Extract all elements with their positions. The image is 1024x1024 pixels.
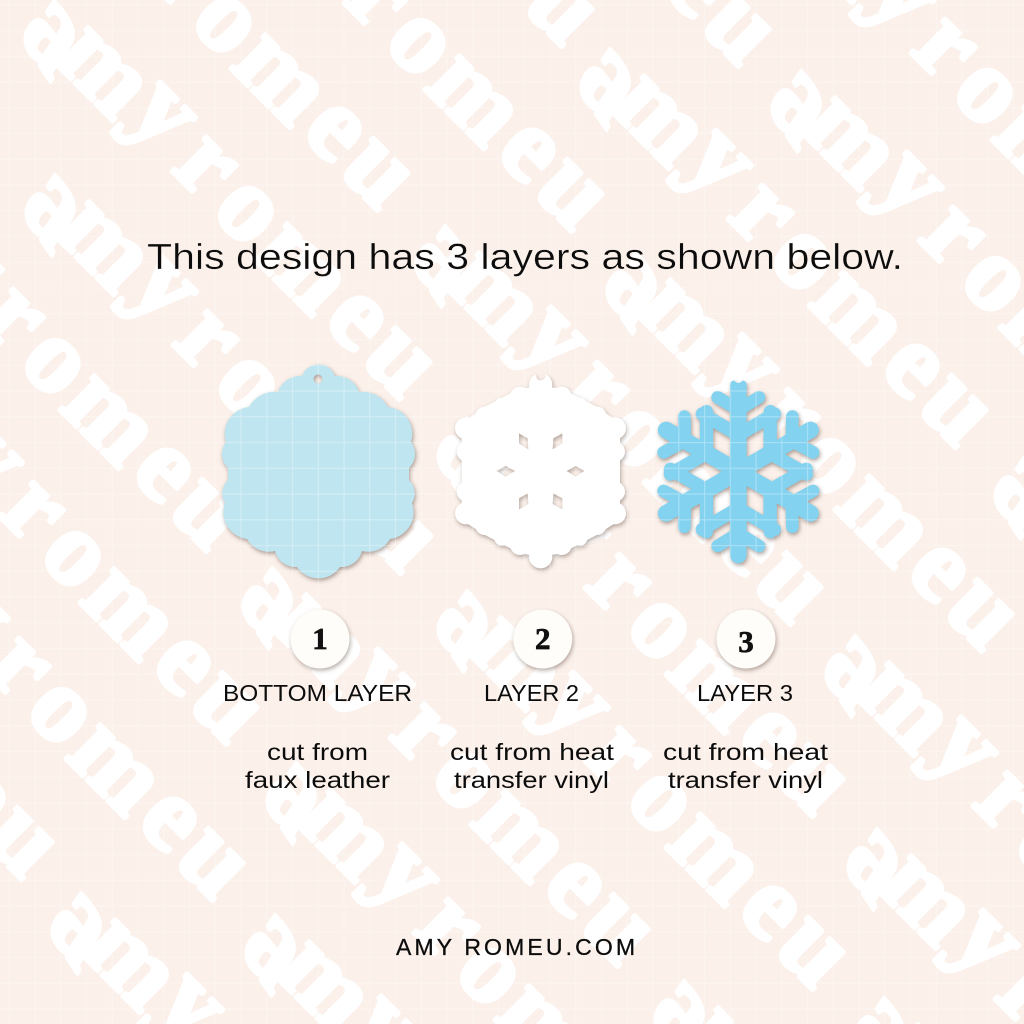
watermark pattern: amy romeu: a: [33, 844, 135, 995]
watermark pattern: amy romeu: a: [7, 126, 109, 277]
number badge 1: 1: [312, 621, 328, 656]
layer 1 material: cut from: [267, 739, 368, 765]
layer 1 material: [245, 739, 390, 793]
watermark pattern: amy romeu: a: [419, 369, 521, 520]
layer 3 label: LAYER 3: [697, 680, 793, 706]
watermark pattern: amy romeu: my romeu: [36, 167, 469, 592]
layer 3: blue snowflake: [648, 381, 828, 555]
footer website: AMY ROMEU.COM: [396, 934, 635, 960]
watermark pattern: amy romeu: my romeu: [448, 583, 881, 1008]
layer 1 material: faux leather: [245, 767, 390, 793]
layer 2 material: transfer vinyl: [454, 767, 609, 793]
watermark pattern: amy romeu: my romeu: [591, 41, 1024, 466]
watermark pattern: amy romeu: a: [224, 519, 326, 670]
watermark pattern: amy romeu: a: [588, 204, 690, 355]
number badge 2: [513, 610, 572, 668]
watermark pattern: amy romeu: a: [829, 780, 931, 931]
watermark pattern: amy romeu: my romeu: [253, 560, 686, 985]
layer 2 material: [450, 739, 615, 793]
watermark pattern: amy romeu: my romeu: [35, 0, 468, 418]
watermark pattern: amy romeu: a: [562, 0, 664, 151]
number badge 3: [716, 610, 776, 668]
layer 1 label: BOTTOM LAYER: [223, 680, 412, 706]
watermark pattern: amy romeu: a: [753, 22, 855, 173]
layer 2: white scalloped snowflake cutout: [455, 373, 626, 568]
watermark pattern: amy romeu: my romeu: [448, 410, 881, 835]
watermark pattern: amy romeu: a: [227, 866, 329, 1017]
number badge 2: 2: [535, 621, 550, 656]
number badge 3: 3: [738, 624, 754, 659]
title: This design has 3 layers as shown below.: [147, 236, 903, 277]
layer 1: scalloped faux leather tag: [222, 365, 415, 578]
watermark pattern: amy romeu: a: [397, 177, 499, 328]
layer 3 material: cut from heat: [663, 739, 829, 765]
layer 3 material: transfer vinyl: [668, 767, 823, 793]
number badge 1: [290, 610, 350, 668]
watermark pattern: amy romeu: my romeu: [426, 218, 859, 643]
layer 2 material: cut from heat: [450, 739, 615, 765]
layer 3 material: [663, 739, 829, 793]
watermark pattern: amy romeu: a: [419, 542, 521, 693]
layer 2 label: LAYER 2: [484, 680, 579, 706]
watermark pattern: amy romeu: a: [807, 587, 909, 738]
watermark pattern: amy romeu: a: [248, 714, 350, 865]
